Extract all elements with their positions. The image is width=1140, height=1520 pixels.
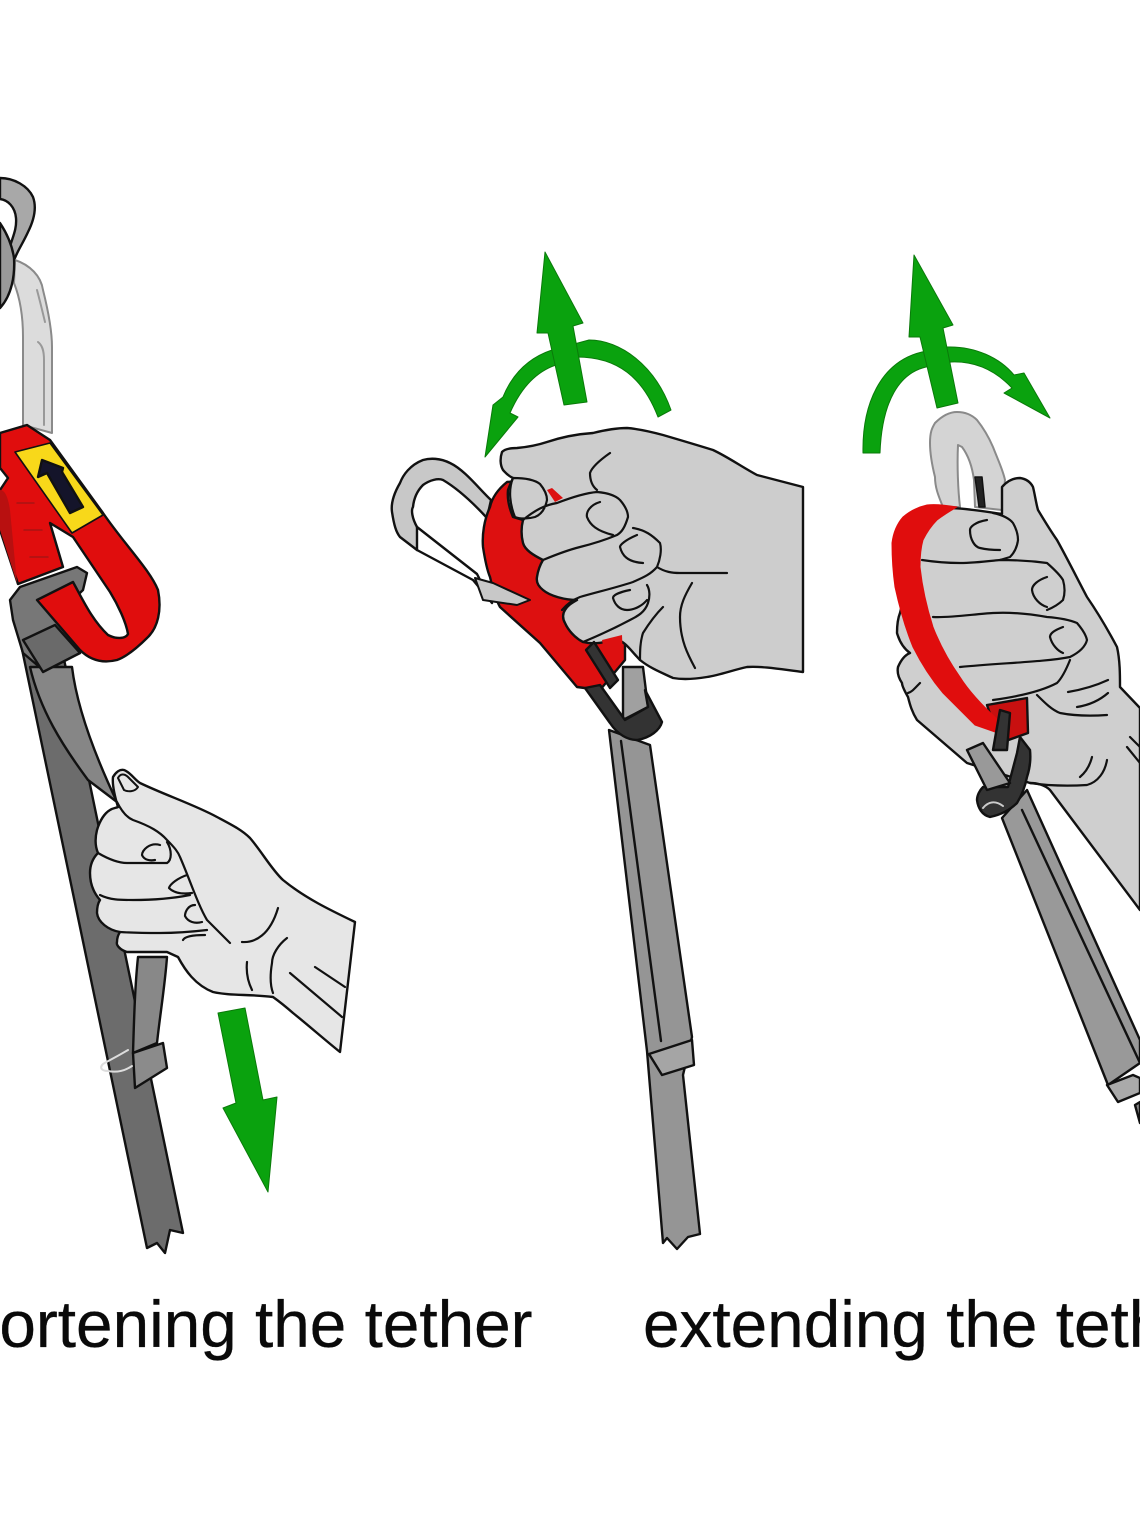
illustration: extending the tether, front bbox=[392, 252, 803, 1249]
strap line bbox=[621, 741, 661, 1041]
finger details bbox=[908, 513, 1140, 786]
carabiner gate bbox=[417, 527, 492, 603]
carabiner pin bbox=[475, 578, 530, 605]
nail: thumb bbox=[118, 774, 138, 791]
strap keeper bbox=[1107, 1075, 1140, 1102]
strap lower bbox=[1135, 1102, 1140, 1123]
hand and arm bbox=[897, 478, 1140, 910]
buckle bbox=[585, 685, 662, 740]
dark red sling edge bbox=[0, 490, 17, 583]
buckle bbox=[977, 737, 1030, 817]
finger details bbox=[510, 453, 727, 668]
carabiner slot bbox=[37, 290, 45, 425]
grey strap inner bbox=[967, 743, 1010, 790]
sling stitch marks bbox=[17, 503, 48, 557]
carabiner bbox=[930, 412, 1005, 510]
icon: green arc arrow bbox=[863, 347, 1050, 453]
buckle lower dark bbox=[23, 625, 80, 672]
icon: anchor plate bbox=[0, 223, 14, 308]
tether strap bbox=[1002, 790, 1140, 1085]
carabiner ring bbox=[392, 459, 491, 550]
icon: carabiner top bbox=[14, 260, 52, 433]
grey strap inner bbox=[623, 667, 648, 720]
icon: green up arrow bbox=[537, 252, 587, 405]
buckle body bbox=[10, 567, 87, 670]
red under strap bbox=[987, 698, 1028, 743]
illustration: shortening the tether bbox=[0, 178, 355, 1253]
red sling bbox=[0, 425, 160, 661]
red sling bbox=[892, 505, 998, 733]
tether pulled strap bbox=[30, 667, 117, 802]
illustration: extending the tether, side bbox=[863, 255, 1140, 1123]
tether long strap bbox=[18, 630, 183, 1253]
tether strap bbox=[609, 730, 700, 1249]
extra red slivers bbox=[547, 488, 623, 662]
icon: black up arrow on label bbox=[38, 460, 83, 513]
keeper hook bbox=[101, 1050, 132, 1072]
carabiner gate bbox=[975, 477, 985, 507]
upper hand bbox=[501, 428, 803, 679]
icon: anchor ring bbox=[0, 178, 35, 258]
strap below hand bbox=[133, 957, 167, 1053]
strap keeper bbox=[649, 1040, 694, 1075]
finger details bbox=[98, 802, 345, 1017]
icon: green up arrow bbox=[909, 255, 958, 408]
strap line bbox=[1022, 810, 1140, 1063]
icon: green arc arrow bbox=[485, 340, 671, 457]
buckle inner bar bbox=[993, 710, 1010, 750]
lower hand bbox=[90, 770, 355, 1052]
buckle slot bbox=[983, 802, 1003, 808]
buckle bar bbox=[586, 642, 618, 688]
red sling bbox=[483, 480, 625, 690]
yellow label bbox=[15, 443, 103, 533]
strap keeper bbox=[133, 1043, 167, 1088]
icon: green down arrow bbox=[218, 1008, 277, 1192]
